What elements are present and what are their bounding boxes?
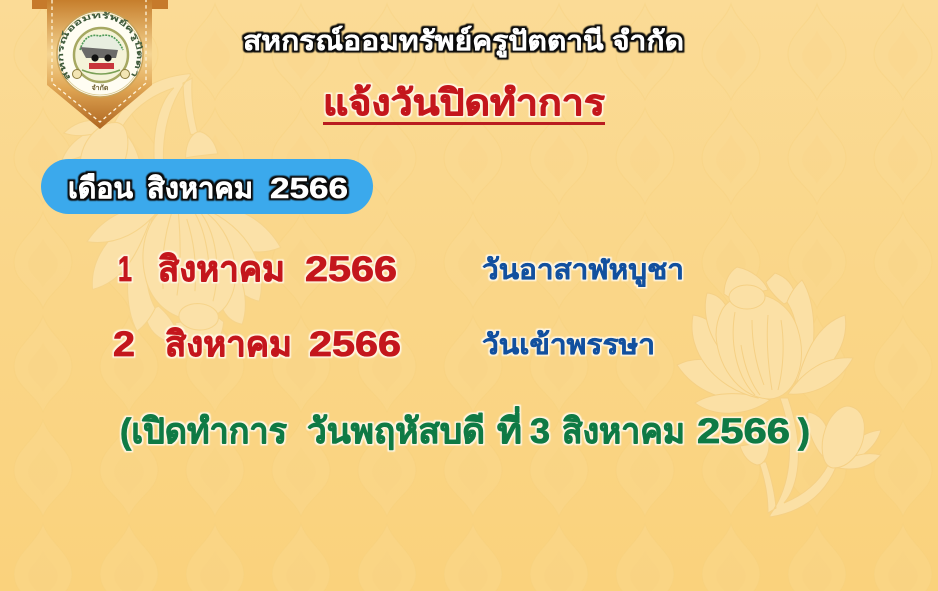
reopening notice: ที่ xyxy=(497,406,522,451)
logo seal xyxy=(56,10,144,98)
row 1 date: 1 xyxy=(118,250,132,289)
row 1 holiday name: วันอาสาฬหบูชา xyxy=(482,254,684,287)
ribbon flaps xyxy=(32,0,168,9)
logo seal: จำกัด xyxy=(92,84,109,92)
ribbon stitching xyxy=(52,0,146,122)
decoration: left lotus xyxy=(49,65,292,355)
month pill: เดือน xyxy=(68,173,133,205)
reopening notice: 2566 xyxy=(697,412,790,451)
row 2 date xyxy=(113,325,401,364)
reopening notice: ) xyxy=(798,412,810,451)
row 2 holiday name: วันเข้าพรรษา xyxy=(482,329,655,360)
month pill: สิงหาคม xyxy=(147,173,253,205)
ribbon xyxy=(47,0,152,129)
month pill xyxy=(41,159,373,214)
reopening notice: สิงหาคม xyxy=(562,412,685,451)
row 1 date xyxy=(118,250,397,289)
reopening notice: 3 xyxy=(530,412,550,451)
reopening notice: วันพฤหัสบดี xyxy=(307,412,485,451)
row 2 date: สิงหาคม xyxy=(165,325,292,364)
title: cooperative name: สหกรณ์ออมทรัพย์ครูปัตตานี จำกัด xyxy=(243,25,684,58)
reopening notice: (เปิดทำการ xyxy=(120,412,287,451)
month pill: 2566 xyxy=(270,173,348,205)
row 1 date: 2566 xyxy=(305,250,397,289)
reopening notice xyxy=(120,406,810,451)
logo ribbon badge xyxy=(32,0,168,129)
heading: closure notice: แจ้งวันปิดทำการ xyxy=(323,82,606,123)
row 2 date: 2566 xyxy=(309,325,401,364)
row 2 date: 2 xyxy=(113,325,135,364)
decoration: right lotus xyxy=(677,267,881,517)
row 1 date: สิงหาคม xyxy=(158,250,285,289)
